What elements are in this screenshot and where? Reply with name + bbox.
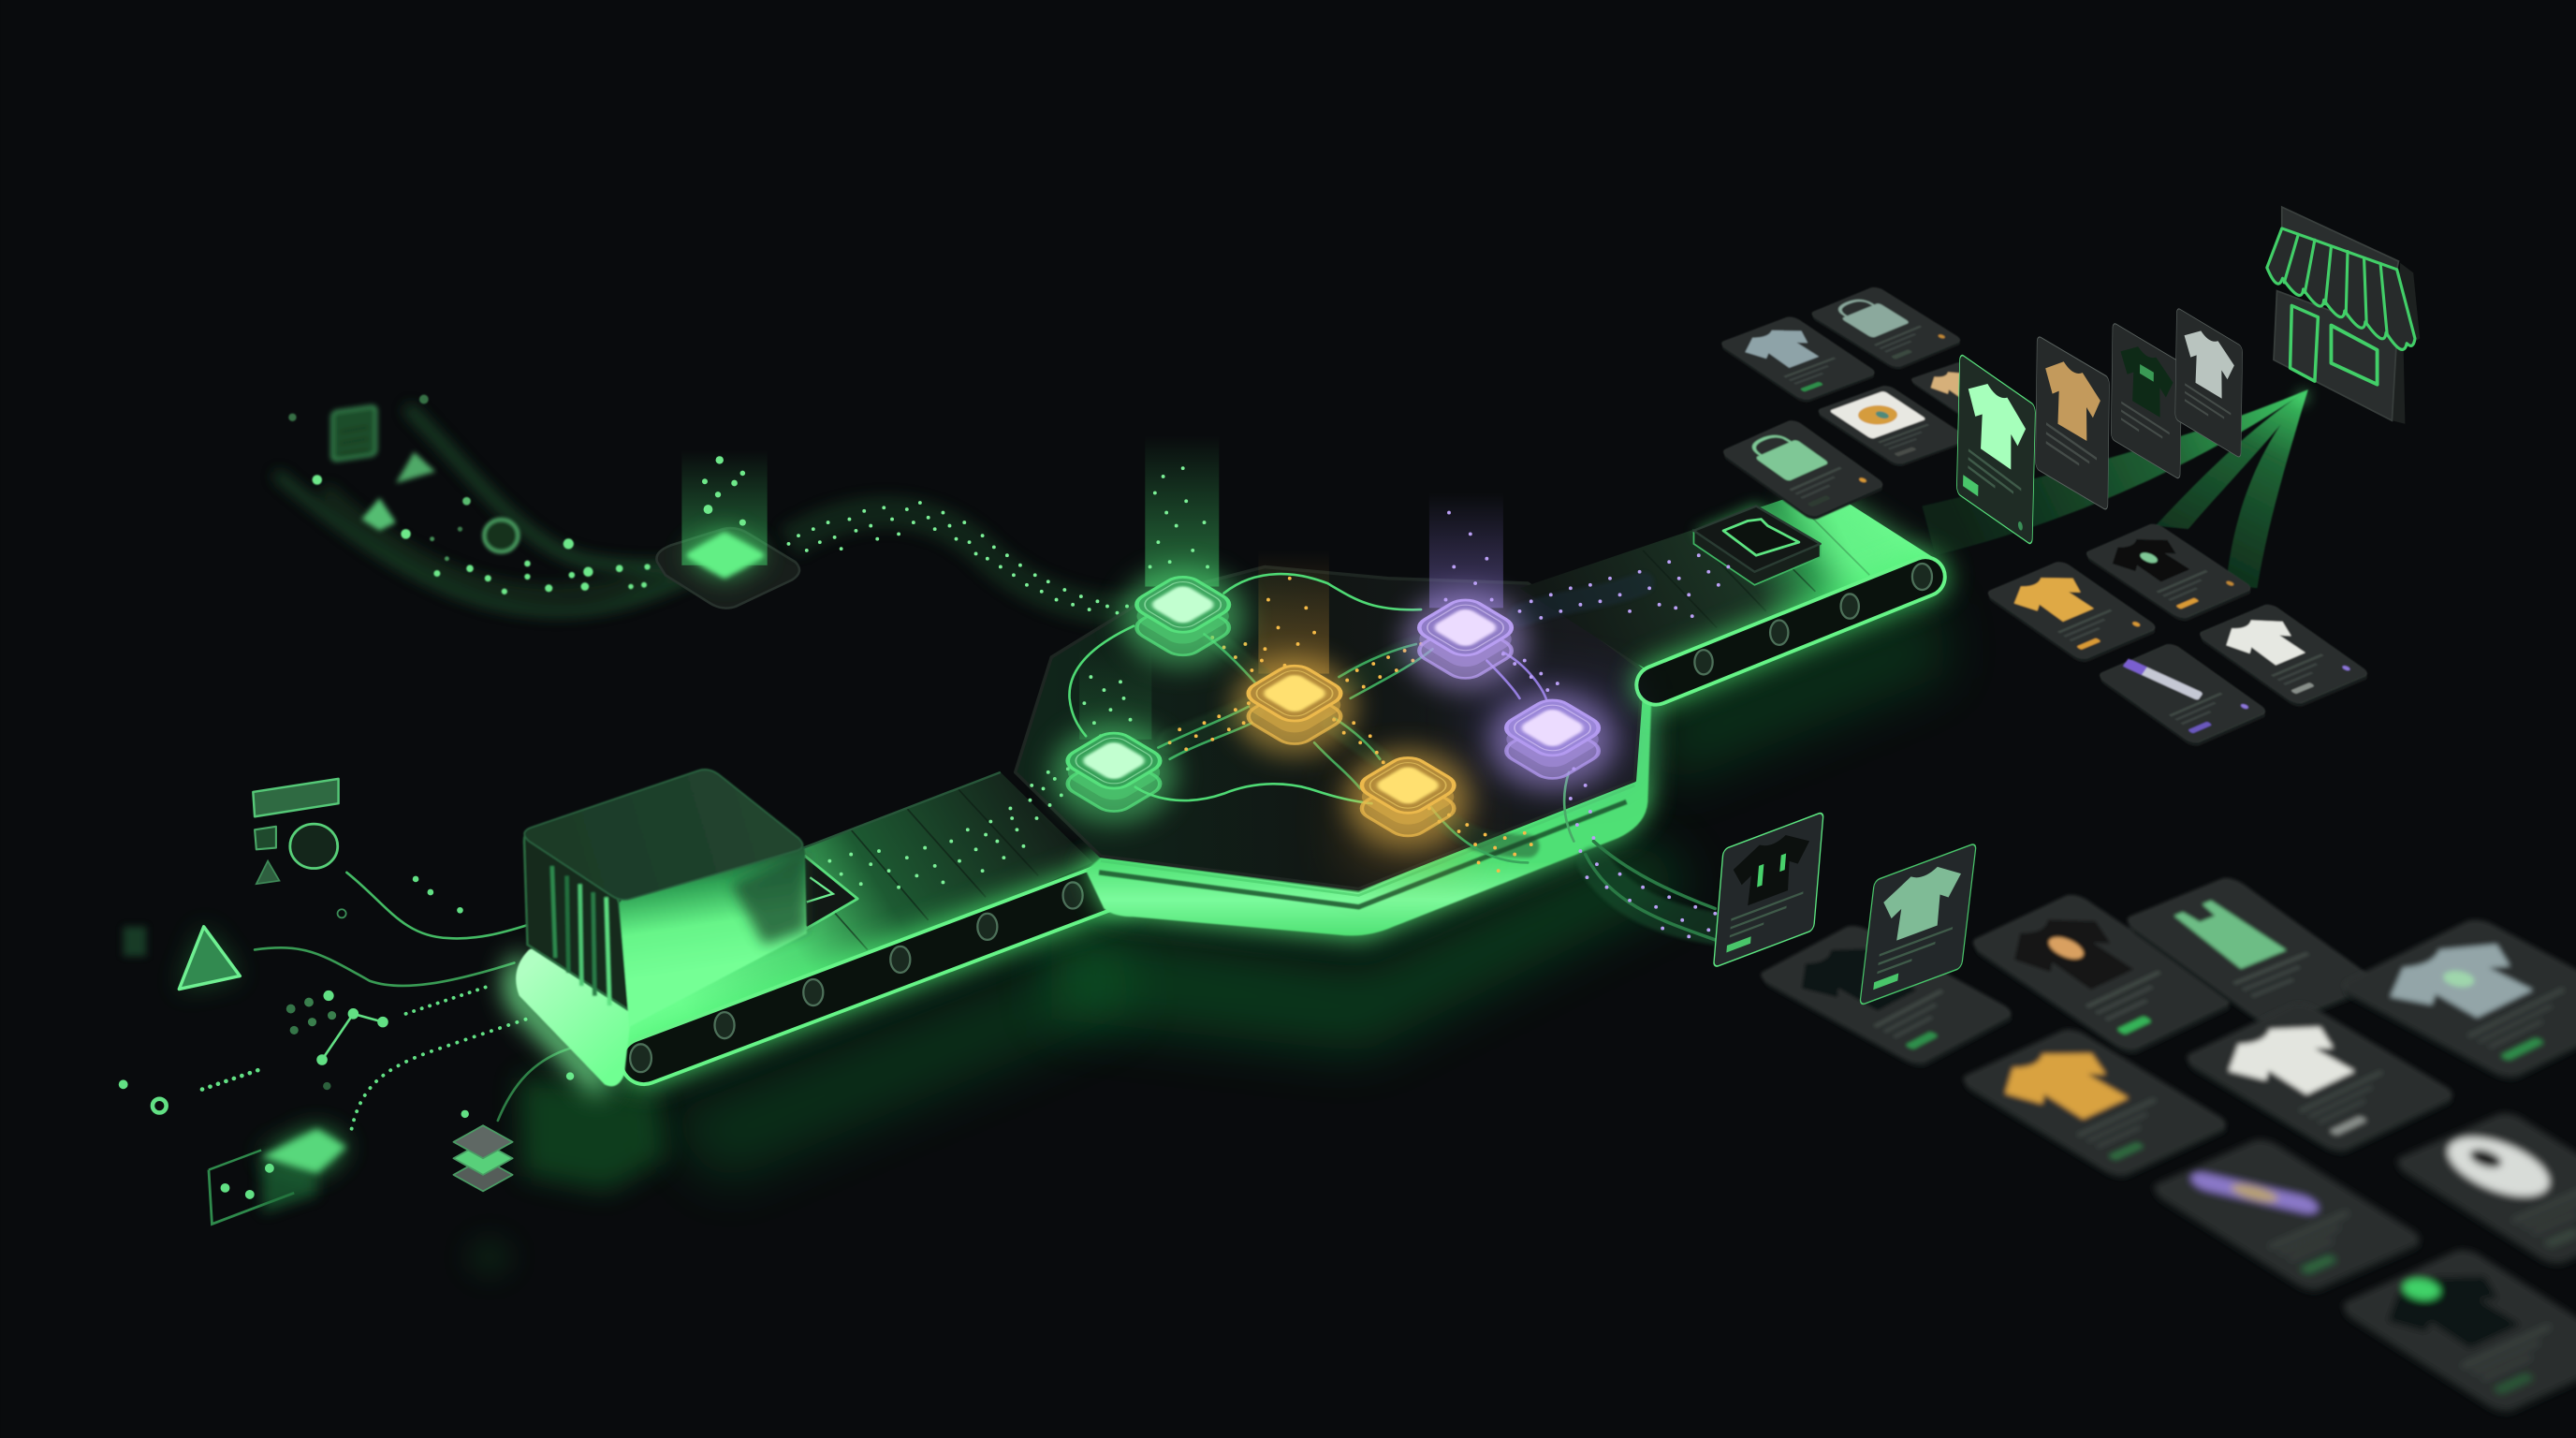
- green arrows converging on the store: [1922, 389, 2308, 588]
- card: dark tee: [2080, 522, 2258, 623]
- belt seams: [1643, 500, 1869, 627]
- ribbons: upstream: [279, 411, 690, 611]
- node: amber two: [1345, 749, 1471, 848]
- ingest station with glowing plate: [656, 450, 799, 609]
- card: blue tee: [1716, 315, 1881, 404]
- icon: card with dots and glowing plate: [209, 1129, 346, 1224]
- green particles: [829, 468, 1208, 888]
- node: purple two: [1490, 692, 1615, 790]
- connector curves: [255, 873, 570, 1121]
- node light beams: [1079, 435, 1627, 871]
- icon: list document: [332, 405, 376, 461]
- document icon: [1723, 520, 1799, 555]
- card: amber tee: [1982, 560, 2162, 664]
- rollers: [1694, 564, 1932, 674]
- card: white print: [1812, 385, 1972, 468]
- dotted connectors: [202, 986, 527, 1129]
- lower conveyor: [516, 772, 1110, 1088]
- card: oval bag: [2387, 1110, 2576, 1269]
- card: green bag: [1717, 419, 1889, 521]
- belt surface: [1519, 486, 1935, 670]
- processing machine box: [524, 770, 807, 1027]
- amber particles: [1170, 579, 1531, 871]
- card: dark tee: [2111, 322, 2182, 479]
- belt end glow: [1782, 486, 1935, 592]
- glowing plate: [690, 536, 761, 575]
- side panel rail: [644, 886, 1110, 1062]
- node: purple one: [1403, 592, 1528, 690]
- small rings: [153, 909, 346, 1113]
- middle flat product cards: [1982, 522, 2374, 748]
- icon: rectangle: [253, 779, 339, 816]
- icon: ring: [484, 520, 519, 552]
- light beam: [681, 450, 768, 565]
- document chip glow: [1693, 503, 1821, 575]
- card: sage tee: [1860, 843, 1976, 1005]
- machine top face: [524, 770, 803, 900]
- icon: big triangle: [179, 927, 240, 990]
- card: dark tee with green marks: [1714, 812, 1823, 968]
- flow connections between nodes: [829, 468, 1728, 940]
- store side thickness: [2392, 263, 2420, 424]
- upper-left data stream: [279, 395, 690, 611]
- particle ribbon from station to first node: [788, 503, 1142, 613]
- document chip side: [1693, 531, 1821, 585]
- store awning: [2267, 228, 2415, 349]
- platform top surface: [1016, 566, 1643, 888]
- node: amber one: [1232, 657, 1357, 756]
- card: green highlighted tee: [1956, 353, 2036, 546]
- store door: [2291, 305, 2318, 381]
- belt segment seams: [788, 788, 1038, 949]
- icon: triangle one: [396, 452, 435, 483]
- machine front face: [620, 846, 807, 1027]
- side panel glow: [644, 886, 1110, 1062]
- purple particles: [1445, 513, 1728, 936]
- floor glow reflections: [466, 600, 1947, 1277]
- card: tan tee: [2036, 335, 2110, 511]
- upright product cards: [1956, 307, 2243, 546]
- rising particles: [702, 456, 746, 526]
- belt surface: [529, 772, 1092, 1071]
- platform rim glow: [1086, 666, 1653, 940]
- machine left face: [524, 832, 629, 1010]
- card: skate deck: [2144, 1137, 2430, 1296]
- front roller glow: [517, 961, 605, 1088]
- central platform: [1016, 566, 1653, 940]
- lower-right flat product cards: [1752, 875, 2576, 1417]
- small chip on lower belt: [772, 856, 857, 929]
- store body: [2274, 291, 2397, 420]
- third row: [2144, 1110, 2576, 1417]
- platform rim inner dark band: [1099, 801, 1627, 907]
- upright cards at platform exit: [1714, 812, 1976, 1005]
- belt far edge: [803, 772, 1001, 848]
- translucent bands: [1170, 583, 1715, 929]
- store window: [2331, 325, 2378, 385]
- card: tank: [2118, 875, 2384, 1033]
- upper conveyor: [1519, 486, 1935, 685]
- rollers: [630, 882, 1083, 1072]
- card: amber blur tee: [1954, 1027, 2236, 1181]
- thin flow curves: [1069, 574, 1715, 940]
- first row: [1752, 875, 2384, 1070]
- dot grid and network: [119, 876, 574, 1118]
- icon: stacked layers: [453, 1125, 513, 1191]
- platform glowing rim: [1086, 666, 1653, 935]
- card: striped tie: [2091, 640, 2272, 748]
- front roller: [516, 936, 633, 1086]
- node: green one: [1120, 568, 1245, 668]
- card: bag grey: [1806, 286, 1967, 371]
- top flat product cards: [1716, 286, 2038, 521]
- side panel dark centre: [644, 886, 1110, 1062]
- machine dark patch near exit: [731, 851, 807, 945]
- store icon: [2267, 207, 2420, 424]
- card: hidden partial: [1907, 361, 2038, 432]
- card: blue blur tee: [2332, 917, 2576, 1084]
- node: green two: [1051, 725, 1177, 823]
- side panel dark centre: [1656, 577, 1925, 685]
- side panel rail: [1656, 577, 1925, 685]
- icon: small triangle: [256, 861, 279, 884]
- card: white tee: [2175, 307, 2243, 459]
- icon: small square: [255, 827, 276, 849]
- card: white tee: [2193, 603, 2374, 709]
- store sign: [2282, 207, 2398, 270]
- card: white blur tee: [2177, 1001, 2463, 1157]
- card: dark hoodie: [2333, 1247, 2576, 1417]
- card: dark tee with print: [1964, 892, 2240, 1057]
- card: dark tee lower: [1752, 923, 2021, 1070]
- station base: [656, 528, 799, 609]
- second row: [1954, 917, 2576, 1181]
- platform green bottom edge: [1101, 785, 1634, 895]
- icon: triangle two: [361, 498, 396, 531]
- icon: big triangle glow: [179, 927, 240, 990]
- side panel glow: [1656, 577, 1925, 685]
- icon: circle: [290, 824, 338, 869]
- scattered particles: [288, 395, 677, 594]
- input icons on the left: [119, 779, 574, 1224]
- machine intake slits: [552, 866, 609, 1005]
- icon: blurred square: [124, 927, 146, 956]
- glowing plate glow: [685, 531, 766, 579]
- document chip top: [1693, 506, 1821, 572]
